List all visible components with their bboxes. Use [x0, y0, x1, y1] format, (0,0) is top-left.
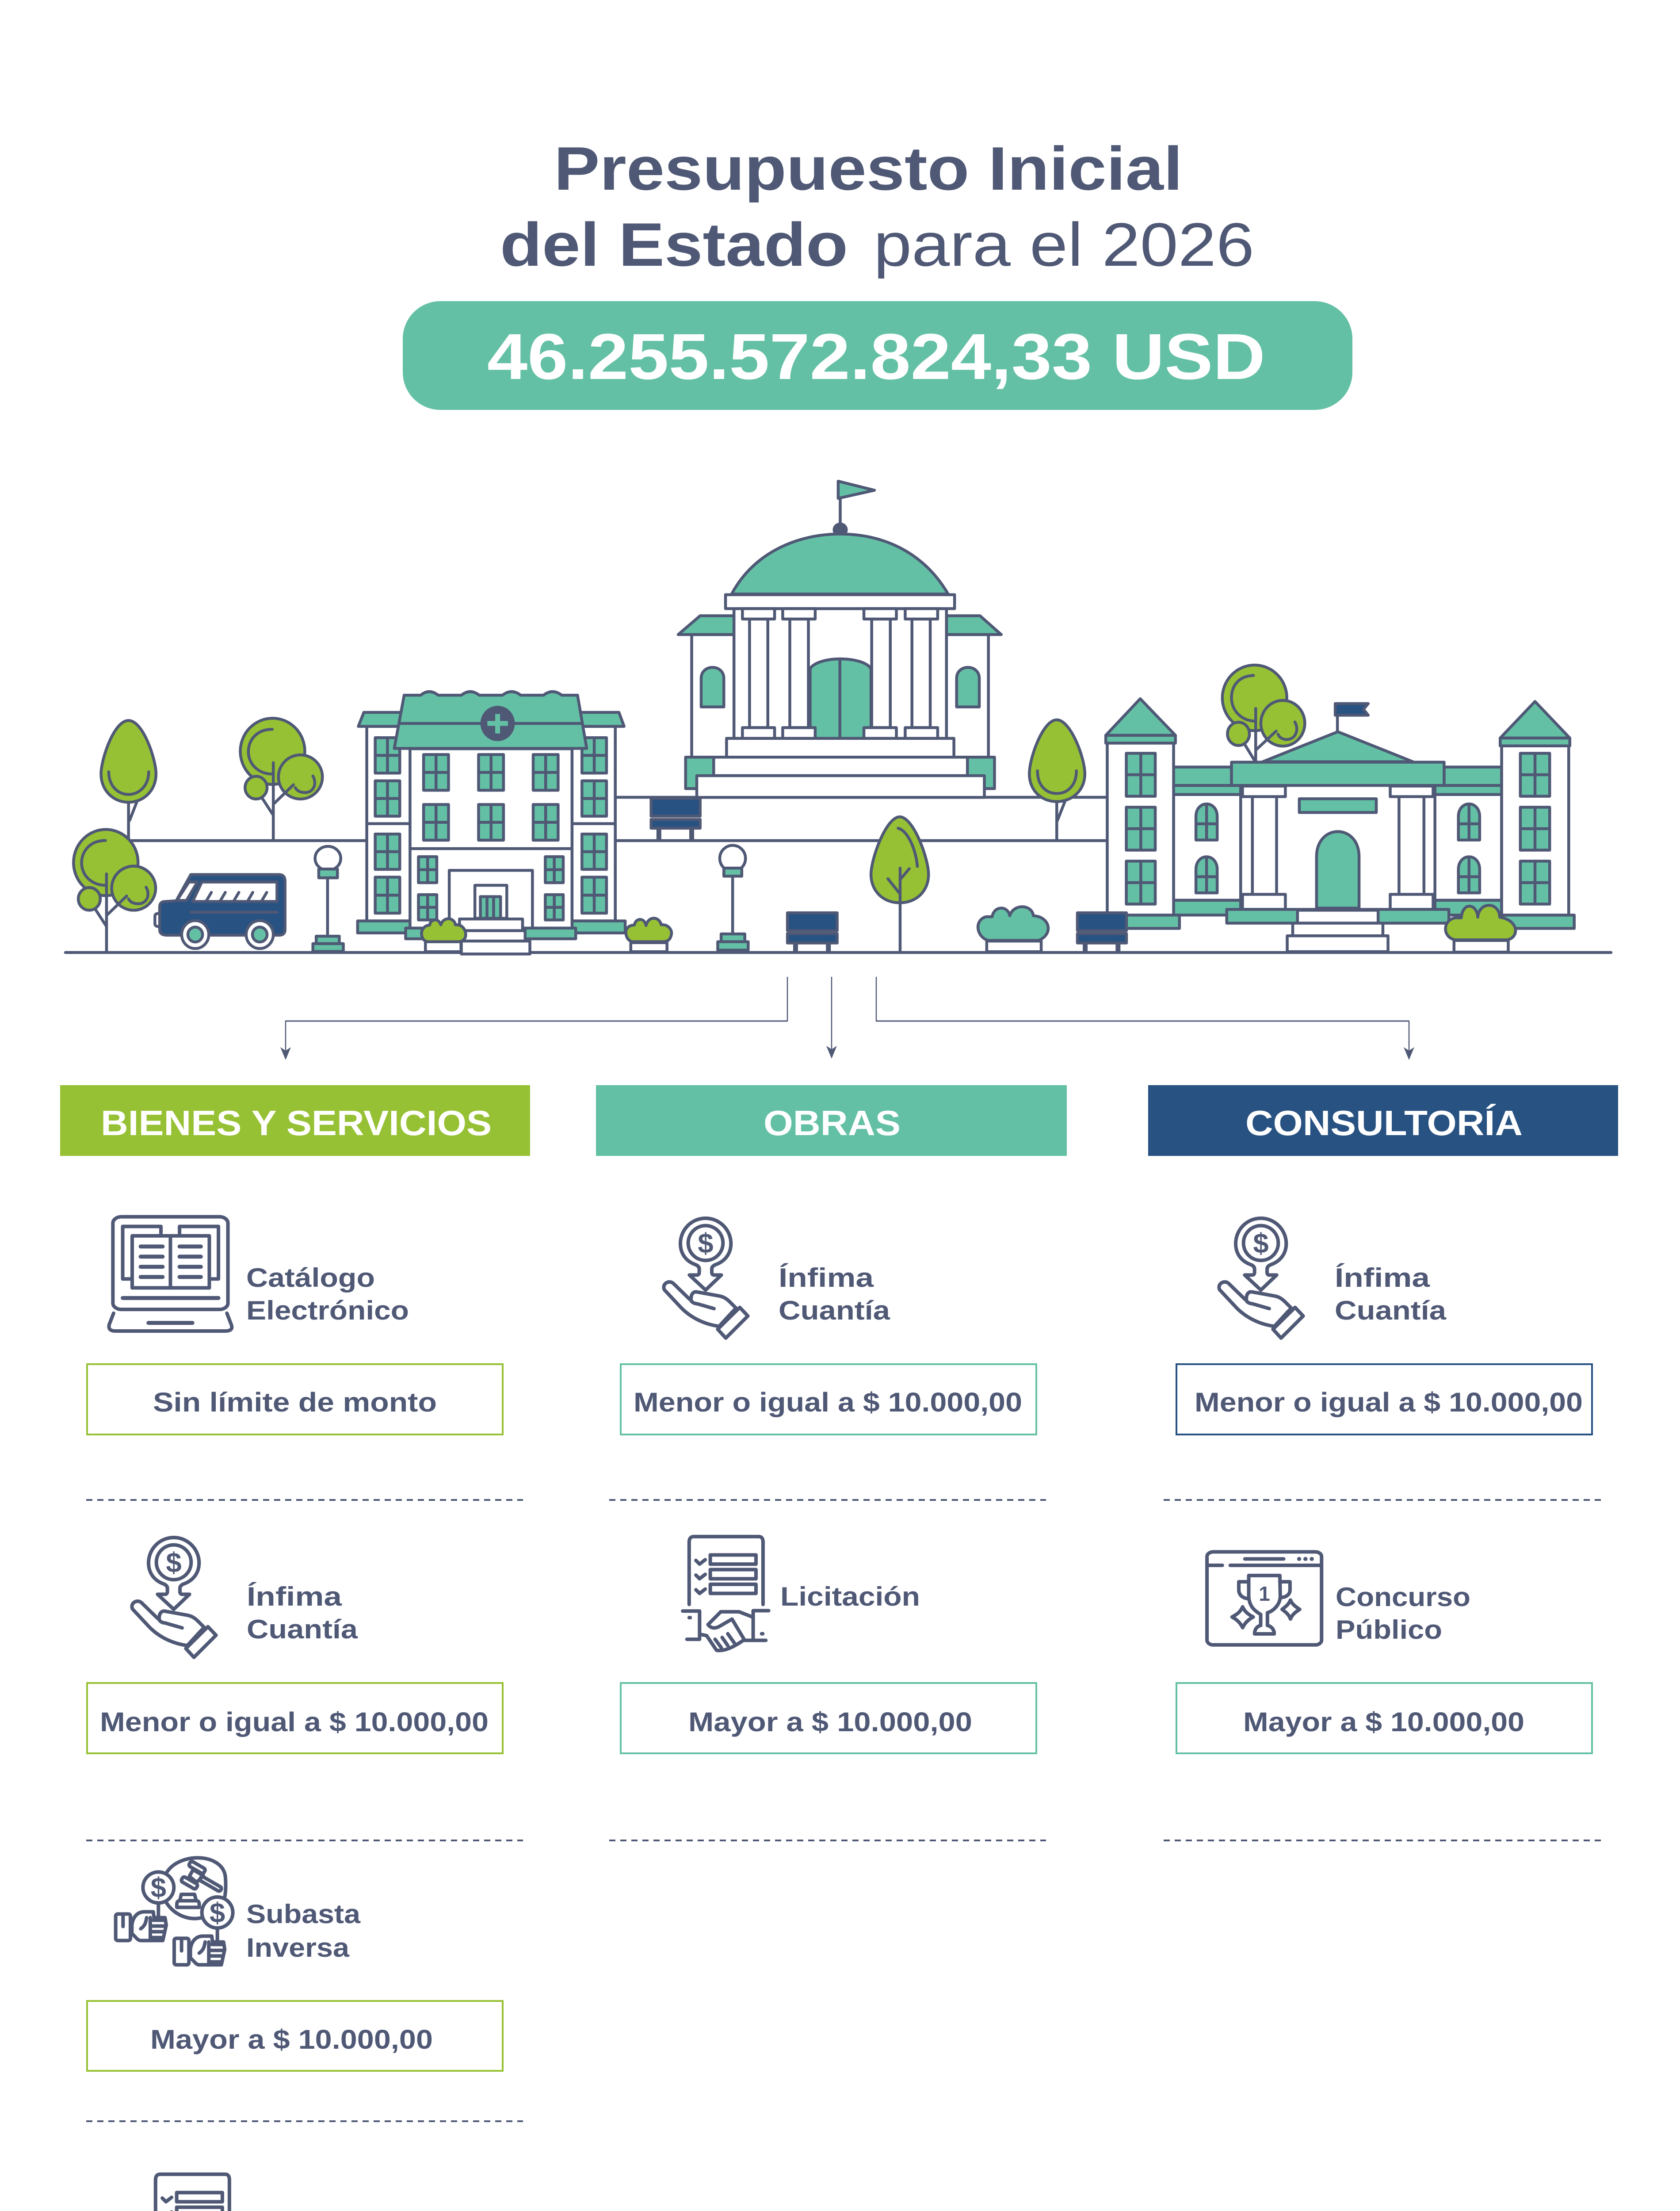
tree behind palace	[1222, 665, 1305, 762]
label: subasta inversa	[246, 1899, 361, 1962]
amount: menor o igual: Menor o igual a $ 10.000,00	[634, 1387, 1022, 1417]
planter left center	[626, 918, 672, 952]
label: licitacion: Licitación	[780, 1582, 920, 1611]
header: bienes y servicios: BIENES Y SERVICIOS	[101, 1103, 492, 1143]
amount: menor o igual: Menor o igual a $ 10.000,00	[100, 1707, 489, 1737]
amount: mayor a: Mayor a $ 10.000,00	[688, 1707, 972, 1737]
government palace building	[1106, 665, 1574, 952]
tree: center teardrop	[871, 817, 928, 952]
street lamp center	[718, 845, 748, 950]
label: infima cuantia: Ínfima	[779, 1263, 874, 1293]
label: catalogo electronico	[246, 1263, 409, 1325]
header: consultoria: CONSULTORÍA	[1245, 1103, 1523, 1143]
amount: mayor a	[621, 1683, 1036, 1753]
label: concurso publico	[1336, 1582, 1470, 1645]
bench center	[787, 913, 837, 952]
connector arrows	[280, 977, 1414, 1060]
header: bienes y servicios	[60, 1085, 530, 1156]
column: obras	[596, 1085, 1067, 1840]
label: catalogo electronico: Catálogo	[246, 1263, 375, 1293]
icon: hand coin: $	[166, 1547, 182, 1578]
amount: menor o igual	[87, 1683, 503, 1753]
title: Presupuesto Inicial	[554, 134, 1183, 203]
van	[155, 875, 285, 949]
total budget pill: 46.255.572.824,33 USD	[487, 321, 1265, 393]
icon: hand coin: $	[698, 1228, 714, 1259]
header: obras	[596, 1085, 1067, 1156]
label: infima cuantia: Ínfima	[247, 1582, 342, 1611]
label: subasta inversa: Inversa	[246, 1933, 350, 1962]
illustration: city scene	[65, 481, 1611, 954]
label: catalogo electronico: Electrónico	[246, 1296, 409, 1325]
amount: mayor a	[87, 2001, 503, 2071]
tree: right teardrop	[1029, 720, 1085, 841]
amount: menor o igual: Menor o igual a $ 10.000,00	[1195, 1387, 1583, 1417]
icon: hand coin	[664, 1218, 748, 1338]
column: bienes y servicios	[60, 1085, 530, 2211]
tree: teardrop left	[101, 720, 156, 841]
icon: laptop catalog	[109, 1217, 232, 1331]
amount: menor o igual	[1176, 1364, 1592, 1434]
header: obras: OBRAS	[764, 1103, 901, 1143]
label: concurso publico: Público	[1336, 1615, 1442, 1645]
column: consultoria	[1148, 1085, 1618, 1840]
amount: mayor a	[1176, 1683, 1592, 1753]
icon: hand coin	[132, 1538, 216, 1657]
icon: hand coin	[1219, 1218, 1303, 1338]
label: infima cuantia: Cuantía	[247, 1614, 358, 1644]
label: infima cuantia	[247, 1582, 358, 1644]
icon: browser trophy	[1207, 1552, 1321, 1645]
icon: browser trophy: 1	[1259, 1582, 1270, 1605]
label: infima cuantia: Cuantía	[779, 1296, 890, 1325]
hospital building	[358, 692, 625, 954]
street lamp left	[313, 846, 344, 952]
icon: reverse auction	[116, 1858, 233, 1965]
title: para el 2026	[874, 210, 1254, 279]
label: infima cuantia: Cuantía	[1335, 1296, 1447, 1325]
trees, lamps, benches, van	[73, 718, 344, 952]
label: infima cuantia: Ínfima	[1335, 1263, 1430, 1293]
amount: mayor a: Mayor a $ 10.000,00	[150, 2024, 433, 2054]
planter teal	[978, 907, 1048, 952]
amount: sin limite: Sin límite de monto	[153, 1387, 437, 1417]
label: infima cuantia	[1335, 1263, 1447, 1325]
label: infima cuantia	[779, 1263, 890, 1325]
icon: reverse auction: $	[151, 1873, 166, 1904]
icon: hand coin: $	[1253, 1228, 1269, 1259]
icon: document and handshake	[683, 1537, 769, 1650]
amount: menor o igual	[621, 1364, 1036, 1434]
label: subasta inversa: Subasta	[246, 1899, 361, 1929]
title	[500, 134, 1254, 279]
title: del Estado	[500, 210, 848, 279]
amount: sin limite	[87, 1364, 503, 1434]
bench upper	[651, 798, 700, 841]
icon: document and handshake	[149, 2174, 235, 2211]
amount: mayor a: Mayor a $ 10.000,00	[1243, 1707, 1524, 1737]
header: consultoria	[1148, 1085, 1618, 1156]
total budget pill	[403, 301, 1352, 410]
tree: cluster upper	[241, 718, 322, 841]
label: concurso publico: Concurso	[1336, 1582, 1470, 1612]
capitol building	[678, 481, 1001, 797]
bench right	[1077, 913, 1126, 952]
icon: reverse auction: $	[210, 1897, 225, 1928]
tree: cluster lower	[73, 830, 156, 952]
